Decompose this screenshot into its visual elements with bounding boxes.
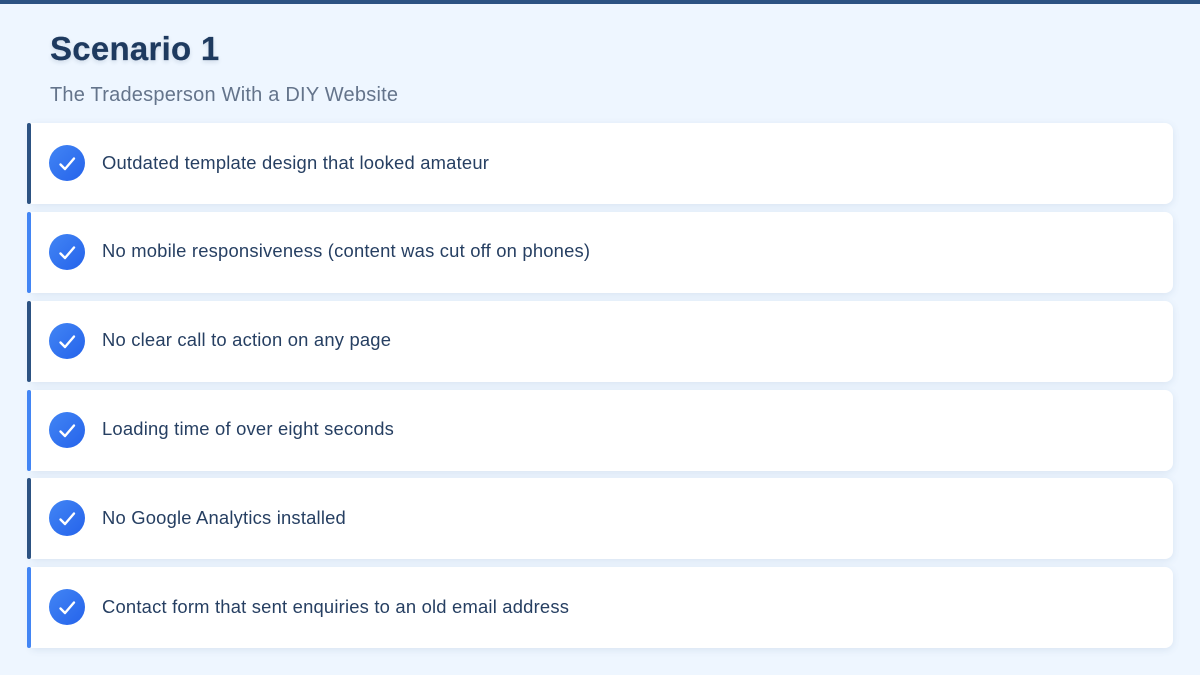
panel: item 2 — [27, 212, 1174, 296]
icon: check — [49, 589, 85, 625]
icon: check — [49, 323, 85, 359]
panel: item 5 — [27, 478, 1174, 562]
item text: No Google Analytics installed — [102, 506, 346, 528]
panel: item 6 — [27, 567, 1174, 651]
icon: check — [49, 145, 85, 181]
panel: item 1 — [27, 123, 1174, 207]
item text: No mobile responsiveness (content was cut off on phones) — [102, 240, 590, 261]
item text: Loading time of over eight seconds — [102, 418, 394, 439]
top accent bar — [0, 0, 1200, 4]
icon: check — [49, 234, 85, 270]
icon: check — [49, 412, 85, 448]
item text: Contact form that sent enquiries to an old email address — [102, 596, 569, 616]
item text: No clear call to action on any page — [102, 329, 391, 350]
item text: Outdated template design that looked amateur — [102, 152, 489, 172]
subtitle: The Tradesperson With a DIY Website — [50, 84, 398, 106]
panel: item 3 — [27, 301, 1174, 385]
title: Scenario 1 — [50, 30, 219, 67]
panel: item 4 — [27, 390, 1174, 474]
icon: check — [49, 500, 85, 536]
